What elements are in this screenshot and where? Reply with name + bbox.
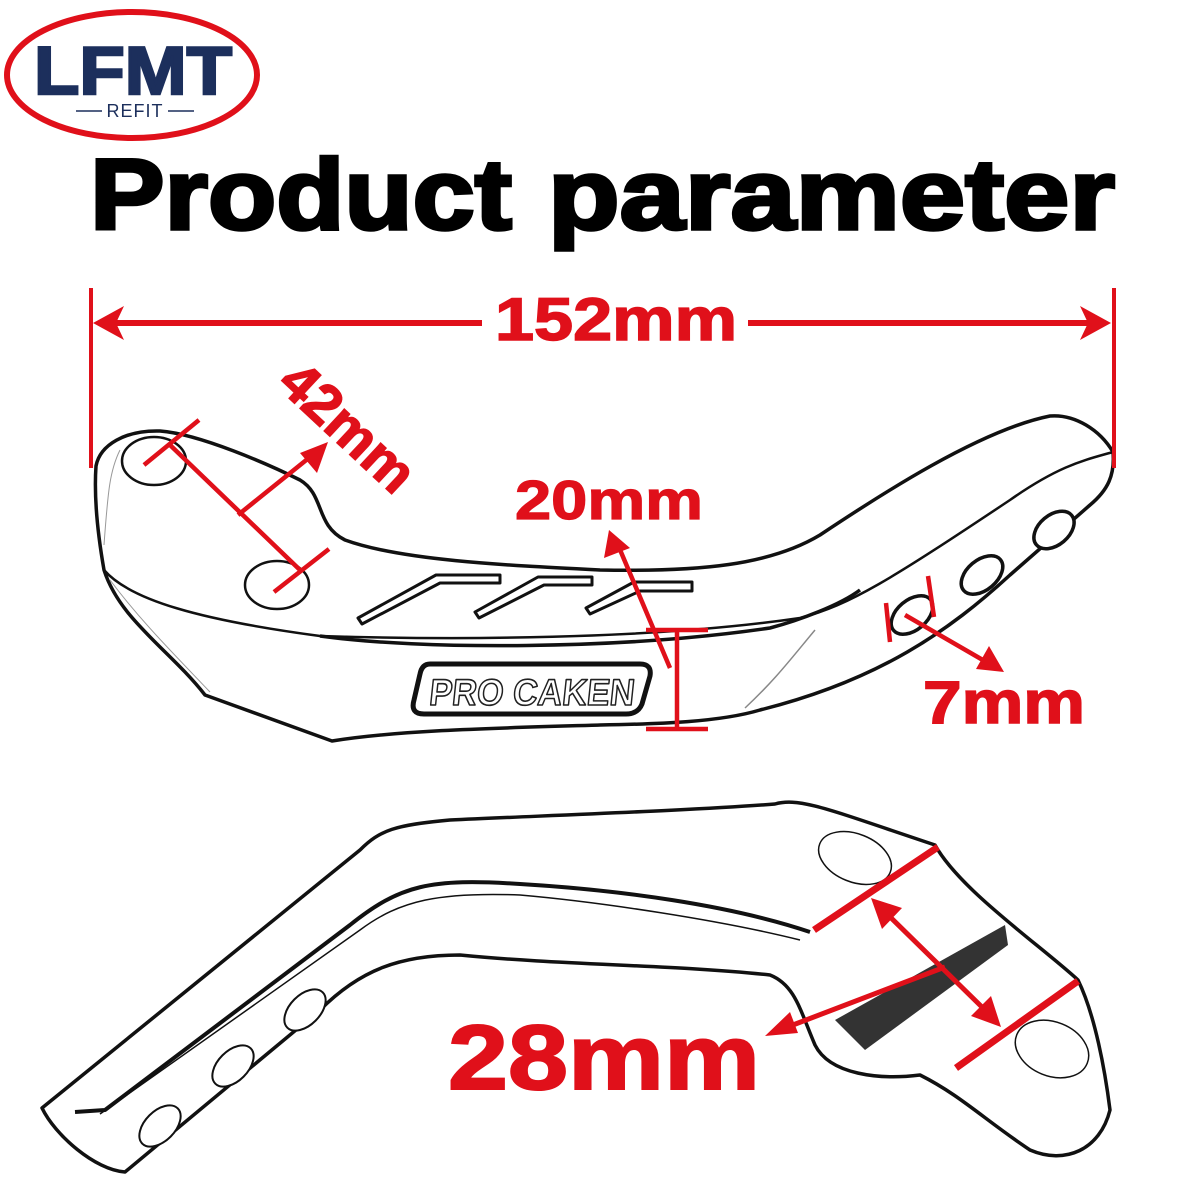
title: [90, 139, 1115, 251]
icon: mounting hole top: [122, 437, 186, 485]
title: parameter: [548, 139, 1115, 251]
upper bracket drawing: [95, 416, 1113, 741]
logo: LFMT Refit: LFMT: [34, 33, 232, 109]
logo: LFMT Refit: REFIT: [106, 101, 164, 121]
icon: lower mounting holes: [811, 822, 1097, 1088]
icon: mounting hole bottom: [245, 561, 309, 609]
dimension: 20mm: 20mm: [515, 469, 703, 531]
dimension: 7mm: [886, 576, 1085, 736]
icon: lower side holes: [132, 982, 333, 1154]
dimension: 42mm: [144, 349, 429, 592]
dimension: 20mm: [515, 469, 708, 730]
dimension: 152mm: 152mm: [495, 286, 737, 353]
dark shaded band: [835, 925, 1008, 1050]
dimension: 7mm: 7mm: [923, 669, 1085, 736]
dimension: 28mm: 28mm: [448, 1007, 760, 1109]
title: Product: [90, 139, 512, 251]
logo: LFMT Refit: [7, 12, 257, 138]
dimension: 152mm: [91, 286, 1114, 468]
icon: PRO CAKEN badge: PRO CAKEN: [428, 671, 637, 713]
dimension: 28mm: [448, 847, 1078, 1109]
icon: side holes: [884, 504, 1081, 642]
lower bracket drawing: [42, 802, 1110, 1172]
dimension: 42mm: 42mm: [268, 349, 429, 505]
icon: slots: [358, 575, 692, 624]
